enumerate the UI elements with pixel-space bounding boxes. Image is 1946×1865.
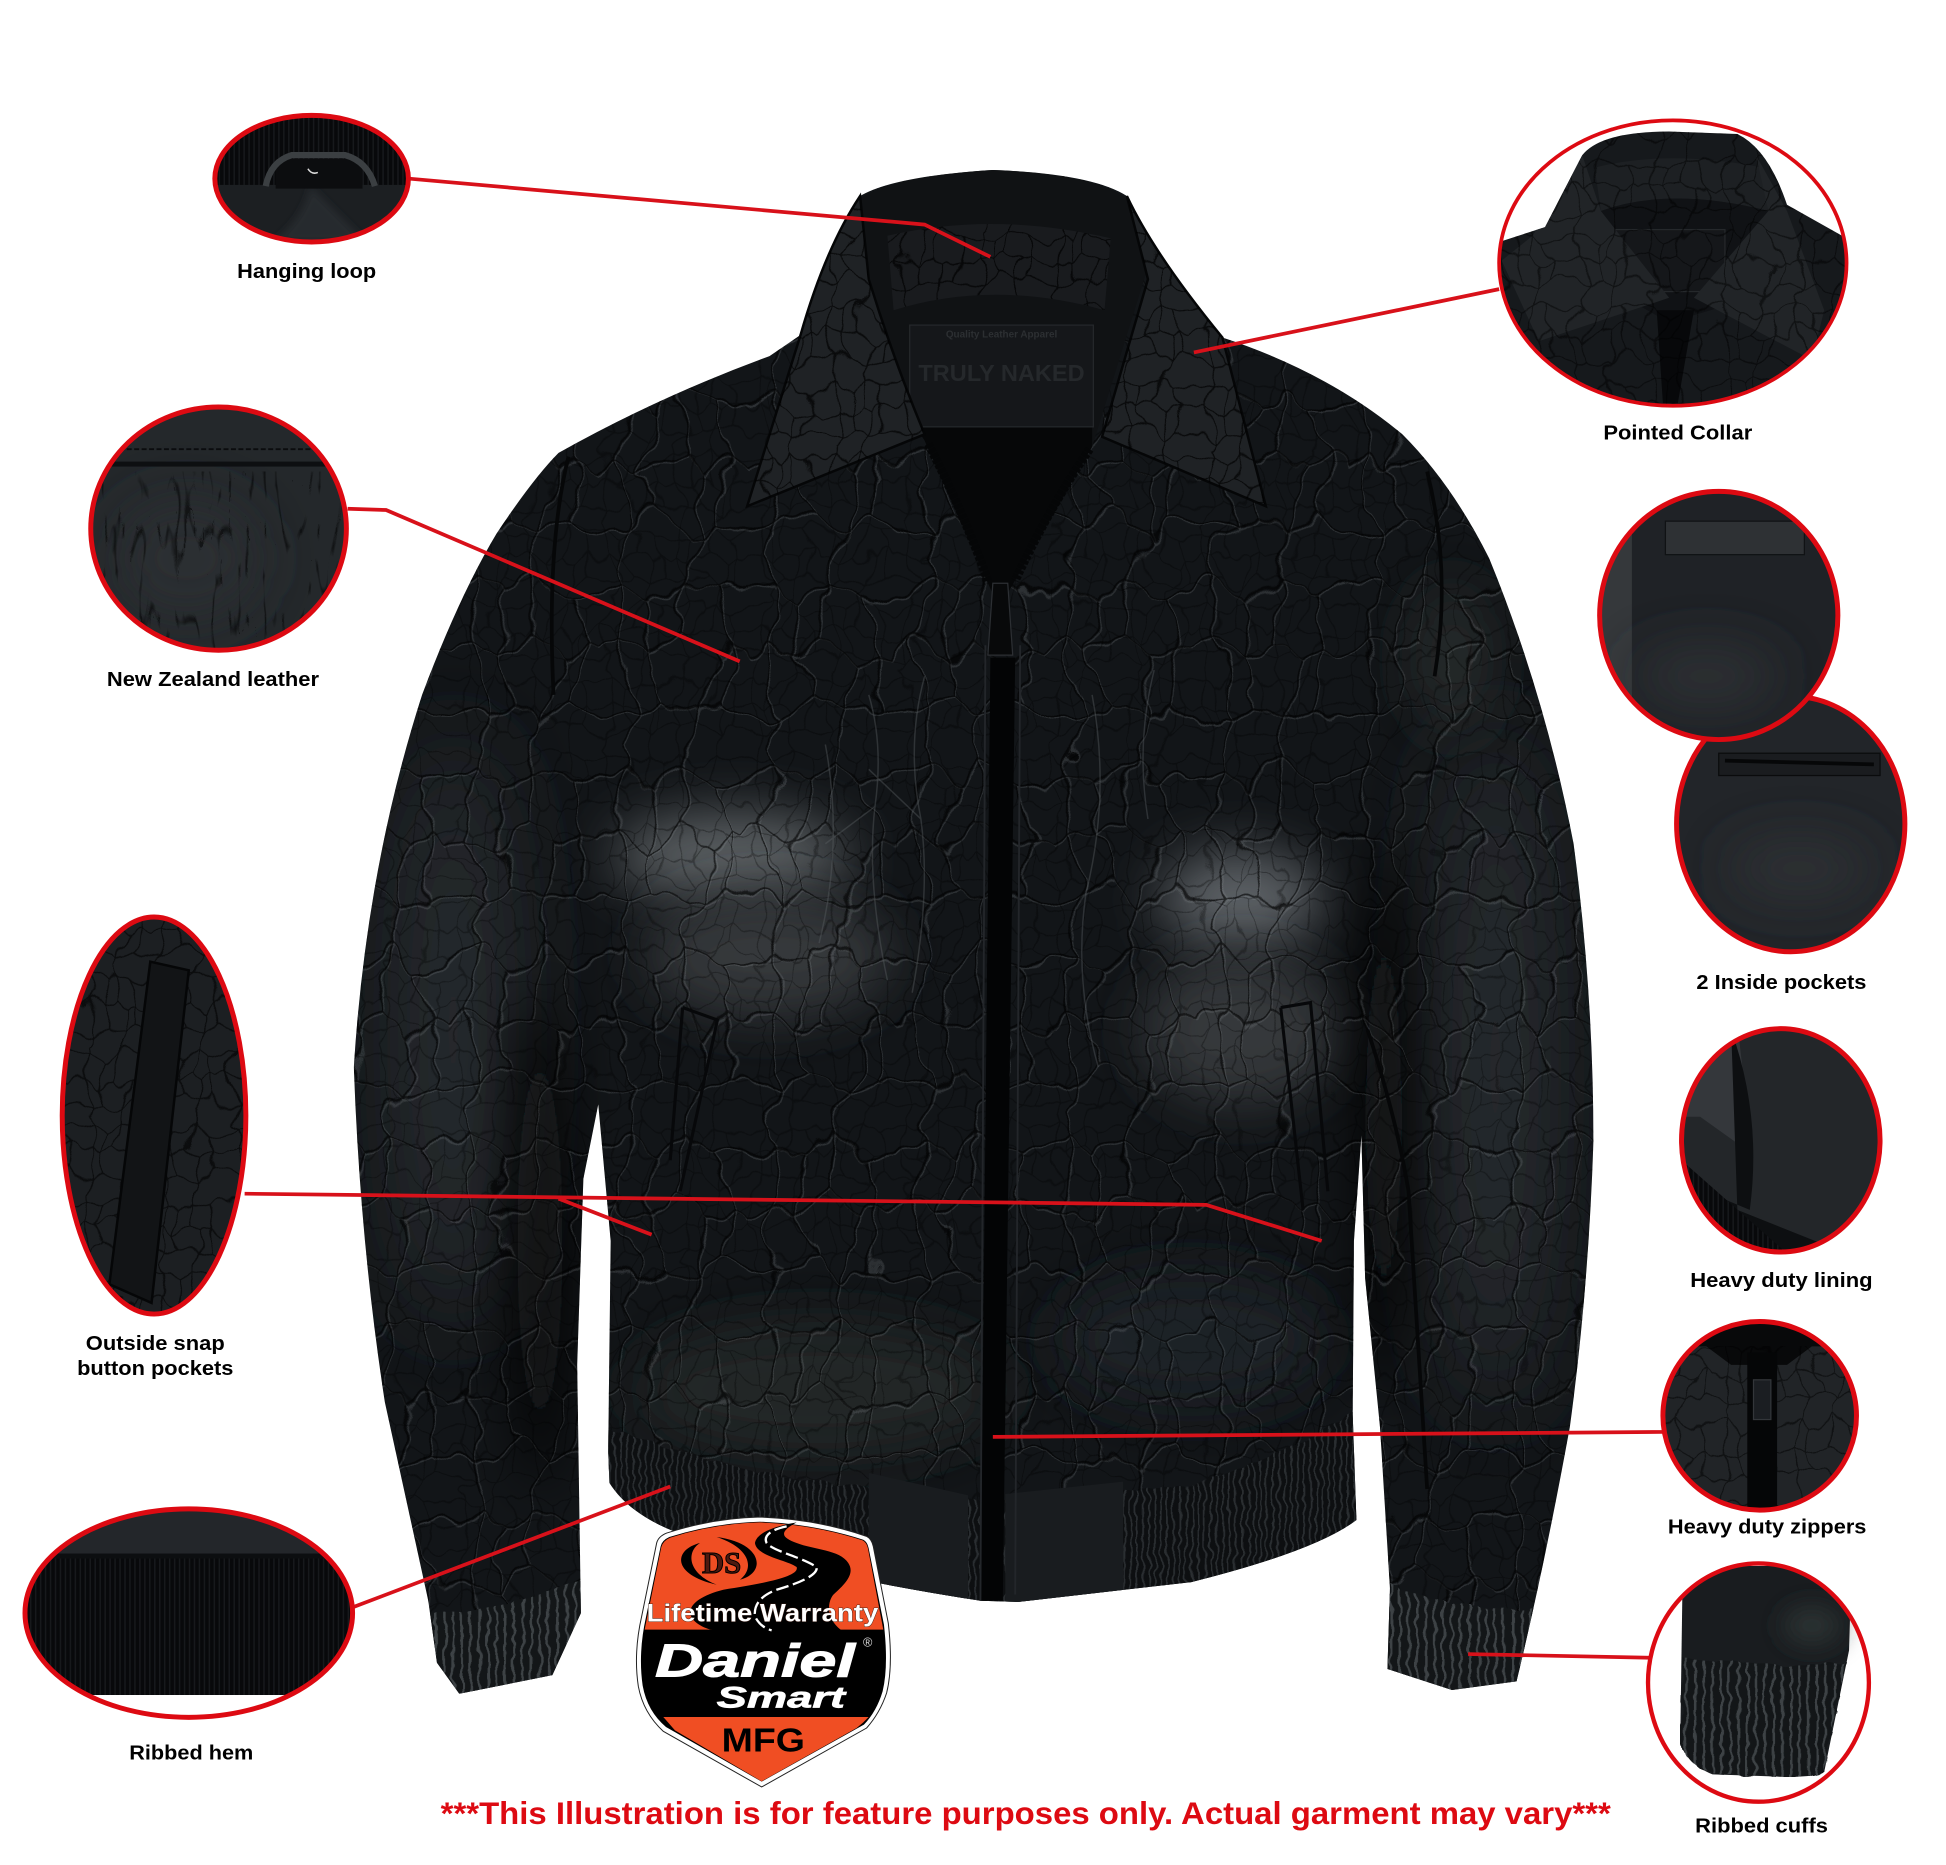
detail: ribbed hem xyxy=(23,1506,355,1724)
line: pointed collar xyxy=(1194,289,1499,352)
line: ribbed cuffs xyxy=(1468,1654,1651,1658)
label: hanging loop: Hanging loop xyxy=(237,260,376,283)
line: outside pockets xyxy=(245,1194,1322,1241)
raglan seams xyxy=(552,457,1442,1489)
disclaimer footer: ***This Illustration is for feature purposes only. Actual garment may vary*** xyxy=(441,1796,1612,1831)
logo: Daniel Smart lifetime warranty shield: Daniel xyxy=(655,1634,856,1686)
DS emblem xyxy=(681,1537,757,1585)
detail: inside pocket lower xyxy=(1669,689,1911,955)
welt pockets xyxy=(670,1003,1328,1210)
logo: Daniel Smart lifetime warranty shield: Lifetime Warranty xyxy=(647,1599,878,1627)
detail: inside pocket upper xyxy=(1595,486,1843,745)
raised veins near zipper xyxy=(819,670,1154,1067)
callout lines xyxy=(245,179,1663,1658)
leather grain texture xyxy=(335,161,1613,1700)
label: New Zealand leather: New Zealand leather xyxy=(107,668,319,691)
label: outside snap button pockets xyxy=(77,1332,233,1380)
line: heavy duty zippers xyxy=(993,1432,1663,1437)
winding road xyxy=(690,1522,851,1630)
label: ribbed hem: Ribbed hem xyxy=(129,1742,253,1765)
jacket illustration xyxy=(335,161,1613,1700)
label: pointed collar: Pointed Collar xyxy=(1603,421,1752,444)
logo: Daniel Smart lifetime warranty shield xyxy=(636,1517,890,1787)
brand tag: Quality Leather Apparel xyxy=(946,330,1057,341)
detail: heavy duty zippers xyxy=(1660,1318,1861,1514)
label: outside snap button pockets: button pockets xyxy=(77,1357,233,1380)
ribbed hem xyxy=(596,1408,1365,1613)
brand tag xyxy=(910,325,1093,427)
label: heavy duty lining: Heavy duty lining xyxy=(1690,1269,1873,1292)
DS emblem: DS xyxy=(702,1546,741,1580)
detail: New Zealand leather xyxy=(87,403,350,651)
line: hanging loop xyxy=(410,179,990,257)
centre zipper xyxy=(928,444,1090,1601)
label: heavy duty zippers: Heavy duty zippers xyxy=(1668,1516,1866,1539)
shading: sleeve and chest sheen xyxy=(397,583,1551,1489)
collar and neck xyxy=(732,170,1278,608)
label: ribbed cuffs: Ribbed cuffs xyxy=(1695,1815,1828,1838)
ribbed cuffs xyxy=(430,1581,581,1694)
detail: pointed collar xyxy=(1495,118,1849,409)
line: ribbed hem xyxy=(354,1487,670,1607)
logo: Daniel Smart lifetime warranty shield: Smart xyxy=(717,1681,848,1714)
detail: ribbed cuffs xyxy=(1644,1559,1874,1807)
detail: outside snap button pockets xyxy=(60,912,252,1322)
label: outside snap button pockets: Outside snap xyxy=(86,1332,225,1355)
label: 2 inside pockets: 2 Inside pockets xyxy=(1696,971,1866,994)
detail: hanging loop xyxy=(211,112,416,247)
brand tag: TRULY NAKED xyxy=(918,360,1085,386)
line: New Zealand leather xyxy=(348,509,740,661)
logo: Daniel Smart lifetime warranty shield: ® xyxy=(863,1635,873,1649)
logo: Daniel Smart lifetime warranty shield: MFG xyxy=(722,1722,805,1759)
detail: heavy duty lining xyxy=(1675,1024,1886,1259)
